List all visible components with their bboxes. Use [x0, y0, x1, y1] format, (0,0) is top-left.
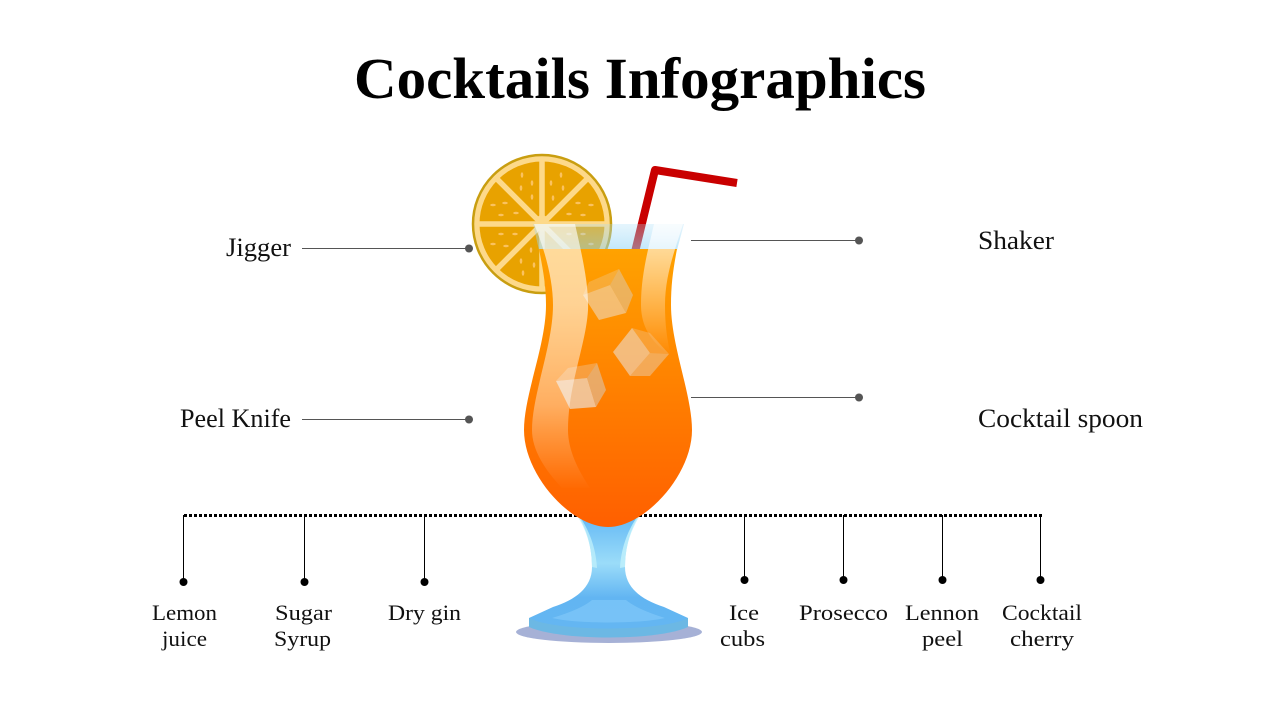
ingredient: Dry gin: Dry gin: [388, 600, 461, 625]
callout: Cocktail spoon: Cocktail spoon: [978, 404, 1143, 433]
glass foot and stem: [529, 515, 688, 638]
ingredient: Lemon juice: juice: [161, 626, 207, 651]
drink: [524, 249, 692, 527]
ingredient: Cocktail cherry: Cocktail: [1002, 600, 1082, 625]
right glass highlight: [641, 224, 683, 356]
callout: Cocktail spoon: [691, 394, 1143, 433]
ingredient: Lemon juice: Lemon: [152, 600, 217, 625]
ingredient: Dry gin: [388, 515, 461, 625]
icon: straw: [635, 170, 737, 252]
title: Cocktails Infographics: [354, 46, 926, 111]
ice cube 3: [556, 363, 606, 409]
ice cube 1: [583, 269, 633, 320]
ingredient: Prosecco: [799, 515, 888, 625]
ingredient: Prosecco: Prosecco: [799, 600, 888, 625]
callout: Shaker: [691, 226, 1054, 255]
ingredient: Ice cubs: [720, 515, 765, 651]
icon: orange slice: [473, 155, 611, 293]
ingredient: Ice cubs: cubs: [720, 626, 765, 651]
glass base shadow: [516, 621, 702, 643]
ingredient: Lennon peel: [905, 515, 979, 651]
ingredient: Lemon juice: [152, 515, 217, 651]
ingredient: Lennon peel: peel: [922, 626, 963, 651]
ingredient: Cocktail cherry: [1002, 515, 1082, 651]
glass rim: [533, 224, 684, 250]
ingredient: Sugar Syrup: Sugar: [275, 600, 333, 625]
ingredient: Sugar Syrup: Syrup: [274, 626, 331, 651]
callout: Jigger: [226, 233, 473, 262]
callout: Peel Knife: Peel Knife: [180, 404, 291, 433]
callout: Jigger: Jigger: [226, 233, 291, 262]
dotted timeline: [184, 514, 1042, 517]
left glass highlight: [532, 224, 590, 488]
ingredient: Cocktail cherry: cherry: [1010, 626, 1074, 651]
callout: Shaker: Shaker: [978, 226, 1054, 255]
callout: Peel Knife: [180, 404, 473, 433]
icon: cocktail glass: [516, 224, 702, 643]
ingredient: Sugar Syrup: [274, 515, 333, 651]
ingredient: Lennon peel: Lennon: [905, 600, 979, 625]
ice cube 2: [613, 328, 669, 376]
ingredient: Ice cubs: Ice: [729, 600, 759, 625]
